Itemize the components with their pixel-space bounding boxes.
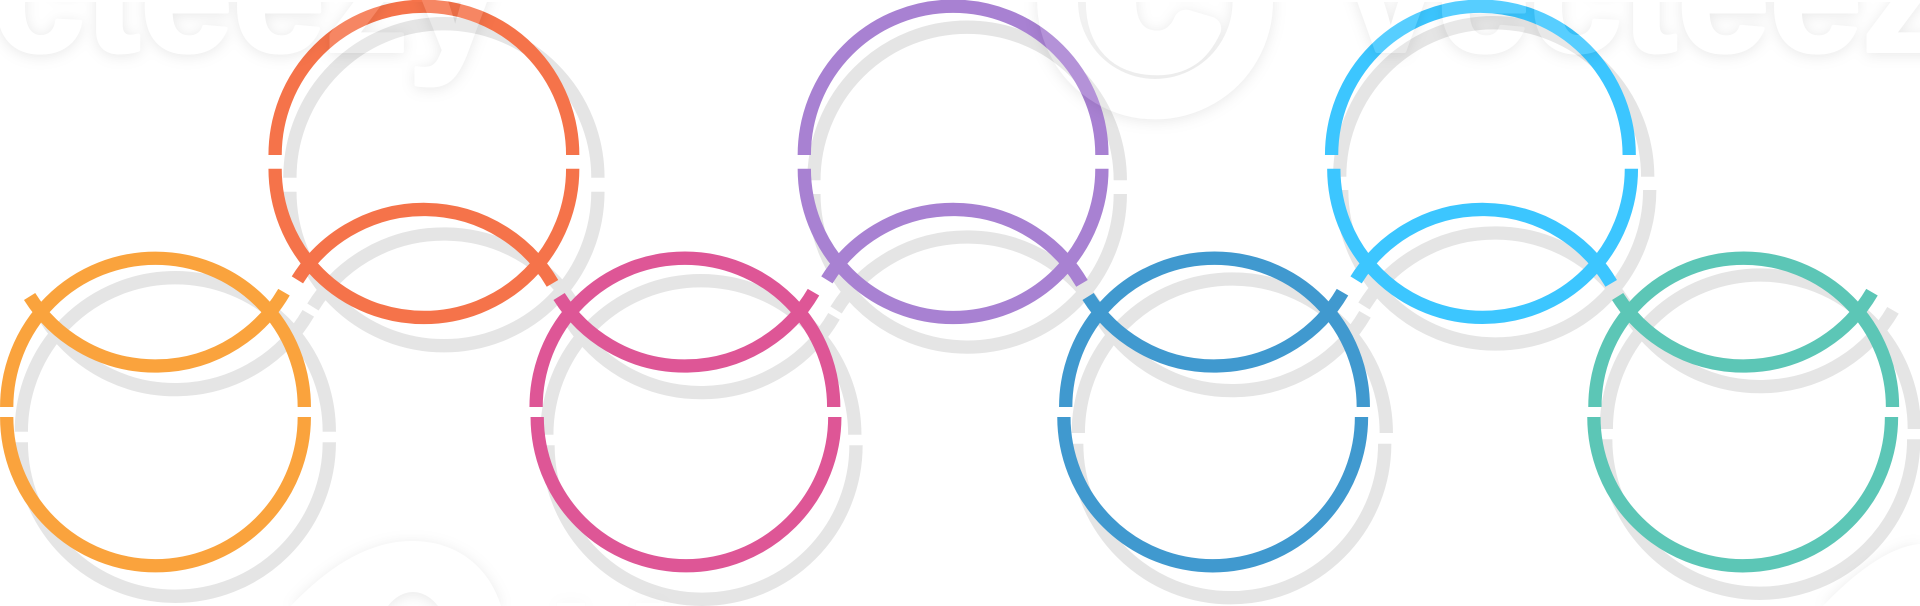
ring: red [275, 6, 573, 317]
shadow: pink ring [547, 281, 856, 599]
ring: blue [1064, 258, 1363, 566]
ring: green [1594, 258, 1892, 566]
watermark shape: bottom left [291, 541, 501, 606]
shadow: orange ring [21, 278, 329, 596]
watermark shape: bottom right [1823, 544, 1920, 606]
shadow: green ring [1606, 275, 1914, 593]
shadow: purple ring [814, 27, 1120, 347]
shadow: blue ring [1077, 279, 1386, 598]
ring: orange [7, 258, 304, 566]
shadow: red ring [290, 24, 598, 346]
ring: pink [536, 258, 835, 566]
ring: purple [804, 6, 1102, 318]
shadow: cyan ring [1340, 23, 1650, 344]
watermark letter tops: bottom centre [557, 603, 664, 606]
ring: cyan [1332, 6, 1631, 317]
